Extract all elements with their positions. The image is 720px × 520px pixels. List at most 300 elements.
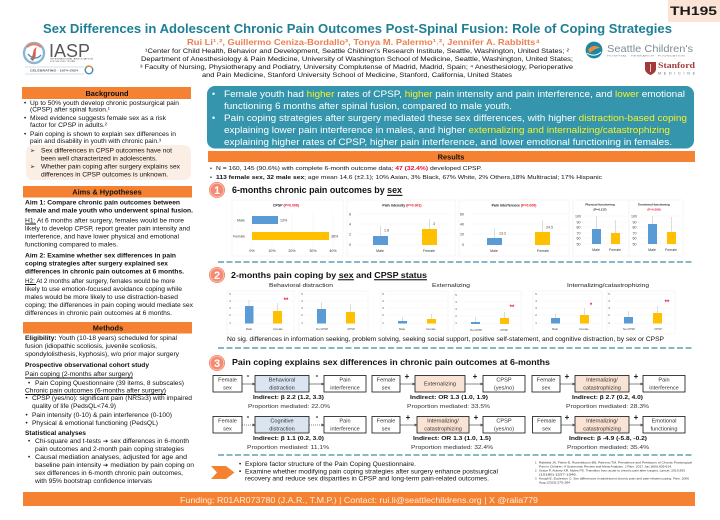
references: (10180):1537-1546. — [539, 472, 577, 476]
hypothesis 2 — [25, 278, 194, 317]
chart group: internalizing/catastrophizing: CPSP — [654, 327, 662, 331]
chart group: behavioral distraction: 5 — [301, 292, 303, 296]
mediation: internalizing to pain interference: Proportion mediated: 28.3% — [566, 404, 649, 410]
background bullets: Up to 50% youth develop chronic postsurgical pain — [30, 100, 180, 107]
chart: emotional functioning by sex: 70 — [632, 231, 636, 235]
chart: emotional functioning by sex: (P=0.008) — [647, 208, 661, 212]
mediation: cognitive distraction to pain interference: Proportion mediated: 11.1% — [247, 445, 329, 451]
methods heading: Methods — [93, 324, 123, 332]
chart: pain intensity by sex: Pain intensity (P=0.001) — [382, 204, 422, 208]
statistical analyses — [25, 430, 195, 485]
chart: pain intensity by sex: 4 — [349, 222, 351, 226]
chart group: externalizing: 1 — [382, 321, 384, 325]
logo: IASP: CELEBRATING · 1974–2024 — [30, 68, 79, 72]
references: Grace P, Aubrey KR, Myles PS. Transition from acute to chronic pain after surgery. Lancet. 2019;393 — [539, 468, 686, 472]
chart title: behavioral distraction: Behavioral distraction — [269, 283, 333, 289]
chart: CPSP rate by sex: 0% — [249, 249, 255, 253]
chart group: behavioral distraction: 5 — [229, 292, 231, 296]
references: Aug;123(3):275-284. — [539, 480, 571, 484]
chart: pain interference by sex: 20 — [460, 232, 464, 236]
logo: Seattle Children's: HOSPITAL · RESEARCH · FOUNDATION — [607, 54, 686, 58]
mediation: internalizing to pain interference: sex — [542, 386, 551, 392]
chart: pain intensity by sex: Female — [423, 249, 435, 253]
logo: Stanford Medicine — [645, 61, 696, 76]
key findings panel: explaining lower pain interference in males, and higher externalizing and internalizing/catastrophizing — [224, 125, 670, 135]
affiliations: ¹Center for Child Health, Behavior and Development, Seattle Children's Research Institute, Seattle, Washington, United States; ² — [145, 48, 569, 55]
chart: pain interference by sex: 24.5 — [546, 226, 553, 230]
chart: physical functioning by sex: 100 — [575, 214, 581, 218]
hypothesis 2: coping; the differences in pain coping would mediate sex — [25, 302, 194, 309]
chart: CPSP rate by sex: 10% — [268, 249, 276, 253]
chart group: internalizing/catastrophizing: No-CPSP — [623, 327, 635, 331]
chart group: internalizing/catastrophizing: * — [590, 303, 593, 309]
knowledge gaps callout: ➢ — [30, 148, 35, 155]
mediation: internalizing to CPSP: + — [406, 413, 411, 422]
study design: Prospective observational cohort study — [25, 362, 150, 369]
mediation: cognitive distraction to pain interference: interference — [330, 426, 360, 432]
hypothesis 1: H1: At 6 months after surgery, females would be more — [25, 217, 185, 224]
mediation: cognitive distraction to pain interference: distraction — [269, 426, 295, 432]
mediation: internalizing to emotional functioning: functioning — [650, 426, 678, 432]
background bullets: pain and disability in youth with chronic pain.³ — [30, 138, 161, 145]
chart group: behavioral distraction: 4 — [301, 299, 303, 303]
future directions: • — [239, 468, 241, 475]
knowledge gaps callout: been well characterized in adolescents. — [41, 155, 157, 162]
mediation: behavioral distraction to pain interference: - — [247, 371, 250, 380]
mediation: behavioral distraction to pain interference: Female — [218, 378, 237, 384]
chart group: externalizing: 4 — [455, 300, 457, 304]
mediation: internalizing to emotional functioning: + — [634, 413, 639, 422]
mediation: cognitive distraction to pain interference: Indirect: β 1.1 (0.2, 3.0) — [253, 436, 324, 442]
chart group: internalizing/catastrophizing: 2 — [535, 313, 537, 317]
affiliations: and Pain Medicine, Stanford University School of Medicine, Stanford, California, United States — [202, 72, 512, 79]
mediation: internalizing to pain interference: Pain — [658, 378, 670, 384]
funding and contact footer — [23, 492, 695, 506]
chart group: externalizing — [381, 283, 521, 334]
chart title: externalizing: Externalizing — [432, 283, 470, 289]
aim 1: female and male youth who underwent spinal fusion. — [25, 207, 193, 214]
mediation: cognitive distraction to pain interference: Cognitive — [270, 418, 294, 424]
chart: physical functioning by sex: 80 — [576, 226, 580, 230]
chart group: externalizing: No-CPSP — [470, 328, 482, 332]
mediation: behavioral distraction to pain interference: Behavioral — [269, 378, 295, 384]
aim 2: Aim 2: Examine whether sex differences in pain — [25, 252, 176, 259]
key findings panel: Female youth had higher rates of CPSP, higher pain intensity and pain interference, and lower emotional — [224, 89, 685, 99]
hypothesis 1: functioning compared to males. — [25, 241, 118, 248]
hypothesis 1 — [25, 217, 191, 248]
mediation: internalizing to pain interference: Female — [537, 378, 555, 384]
chart: physical functioning by sex: Male — [592, 248, 600, 252]
results heading — [208, 151, 695, 162]
aims heading: Aims & Hypotheses — [72, 188, 142, 196]
eligibility — [25, 335, 180, 358]
chart: emotional functioning by sex: 50 — [632, 242, 636, 246]
eligibility: spondylolisthesis, kyphosis), w/o prior major surgery — [25, 351, 180, 358]
background bullets: factor for CPSP in adults.² — [30, 122, 107, 129]
references: Keogh E, Eccleston C. Sex differences in adolescent chronic pain and pain-related coping. Pain. 2006 — [539, 476, 690, 480]
chart group: internalizing/catastrophizing — [533, 283, 675, 334]
mediation: externalizing to CPSP: Indirect: OR 1.3 (1.0, 1.9) — [410, 395, 488, 401]
chart group: behavioral distraction: 3 — [301, 306, 303, 310]
aim 2: coping strategies after surgery explained sex — [25, 260, 169, 267]
mediation: internalizing to emotional functioning: Proportion mediated: 35.4% — [567, 445, 649, 451]
mediation: externalizing to CPSP: + — [473, 372, 478, 381]
background bullets: • — [24, 131, 26, 138]
mediation: internalizing to CPSP: catastrophizing — [424, 426, 462, 432]
chart: emotional functioning by sex: Emotional functioning — [638, 202, 670, 206]
mediation: externalizing to CPSP: Proportion mediated: 33.5% — [407, 404, 490, 410]
chart: pain intensity by sex — [347, 200, 455, 256]
chart: CPSP rate by sex: 40% — [329, 249, 337, 253]
chart: pain interference by sex: 13.2 — [499, 232, 506, 236]
mediation: internalizing to CPSP — [372, 413, 525, 451]
section 2 number badge: 2 — [214, 270, 220, 282]
statistical analyses: Statistical analyses — [25, 430, 87, 437]
mediation: externalizing to CPSP: Female — [377, 378, 395, 384]
references: 2. — [535, 468, 537, 472]
chart group: behavioral distraction: No-CPSP — [316, 327, 328, 331]
mediation: internalizing to pain interference: interference — [649, 386, 679, 392]
chart group: behavioral distraction: CPSP — [347, 327, 355, 331]
sample description — [210, 166, 602, 181]
chart group: externalizing: 2 — [455, 314, 457, 318]
section 3 heading: Pain coping explains sex differences in chronic pain outcomes at 6-months — [232, 357, 550, 367]
measures: • — [28, 380, 30, 387]
mediation: externalizing to CPSP — [372, 372, 525, 410]
logo: IASP: FOR THE STUDY OF PAIN — [50, 60, 76, 63]
sample description: 113 female sex, 32 male sex ; age mean 14.6 (±2.1); 10% Asian, 3% Black, 67% White, 2% Others,18% Multiracial; 17% Hispanic — [216, 175, 602, 181]
knowledge gaps callout: Whether pain coping after surgery explains sex — [41, 163, 181, 170]
section 1 number badge — [209, 182, 225, 198]
chart group: internalizing/catastrophizing: 1 — [535, 321, 537, 325]
aim 1: Aim 1: Compare chronic pain outcomes between — [25, 199, 180, 206]
statistical analyses: with 95% bootstrap confidence intervals — [34, 478, 152, 485]
measures: Pain intensity (0-10) & pain interference (0-100) — [32, 412, 172, 419]
chart group: externalizing: 5 — [455, 293, 457, 297]
chart group: internalizing/catastrophizing: 5 — [608, 292, 610, 296]
chart group: behavioral distraction: 1 — [229, 321, 231, 325]
chart group: externalizing: 5 — [382, 292, 384, 296]
chart group: internalizing/catastrophizing: ** — [665, 300, 670, 306]
authors: Rui Li¹˒², Guillermo Ceniza-Bordallo³, Tonya M. Palermo¹˒², Jennifer A. Rabbitts⁴ — [187, 37, 540, 47]
future directions: Examine whether modifying pain coping strategies after surgery enhance postsurgical — [245, 468, 498, 475]
mediation: behavioral distraction to pain interference — [213, 371, 366, 410]
statistical analyses: • — [28, 454, 30, 461]
statistical analyses: pain outcomes and 2-month pain coping strategies — [35, 446, 184, 453]
chart: emotional functioning by sex: Male — [648, 248, 656, 252]
chart: pain interference by sex: Pain interference (P=0.009) — [492, 204, 536, 208]
chart group: externalizing: 2 — [382, 313, 384, 317]
eligibility: fusion (idiopathic scoliosis, juvenile scoliosis, — [25, 343, 157, 350]
section 2 heading: 2-months pain coping by sex and CPSP status — [231, 270, 427, 280]
background heading: Background — [85, 89, 129, 98]
chart: CPSP rate by sex: 38% — [331, 234, 339, 238]
key findings panel: explaining higher rates of CPSP, higher pain interference, and lower emotional functioning in females. — [224, 137, 672, 147]
chart group: internalizing/catastrophizing: 4 — [535, 299, 537, 303]
background bullets: • — [24, 115, 26, 122]
mediation: internalizing to emotional functioning: Female — [537, 418, 556, 424]
mediation: externalizing to CPSP: (yes/no) — [494, 386, 514, 392]
chart: pain intensity by sex: 2 — [349, 232, 351, 236]
chart: physical functioning by sex: 70 — [576, 231, 580, 235]
future directions — [239, 461, 498, 483]
mediation: internalizing to CPSP: Indirect: OR 1.3 (1.0, 1.5) — [413, 436, 491, 442]
chart: pain interference by sex: 0 — [462, 243, 464, 247]
chart: pain interference by sex: Male — [490, 249, 498, 253]
statistical analyses: Causal mediation analyses, adjusted for age and — [35, 454, 188, 461]
aims heading — [23, 186, 192, 198]
icon: future directions chevron — [211, 466, 234, 479]
knowledge gaps callout: ➢ — [30, 164, 35, 171]
affiliations — [140, 48, 574, 79]
mediation: cognitive distraction to pain interference: Pain — [339, 418, 351, 424]
poster id badge — [668, 0, 720, 22]
aim 2 — [25, 252, 184, 275]
mediation: internalizing to CPSP: (yes/no) — [494, 426, 514, 432]
mediation: internalizing to emotional functioning: Internalizing/ — [586, 418, 618, 424]
logo: Stanford Medicine: MEDICINE — [658, 72, 696, 76]
references — [535, 460, 693, 484]
hypothesis 2: differences in chronic pain outcomes at 6 months. — [25, 310, 172, 317]
background bullets: Mixed evidence suggests female sex as a risk — [30, 115, 167, 122]
logo: IASP: IASP — [49, 41, 90, 61]
chart: physical functioning by sex: Physical functioning — [585, 202, 615, 206]
chart group: behavioral distraction: 4 — [229, 299, 231, 303]
mediation: behavioral distraction to pain interference: distraction — [269, 386, 295, 392]
mediation: internalizing to emotional functioning: + — [565, 413, 570, 422]
mediation: internalizing to CPSP: CPSP — [496, 418, 512, 424]
section 2 number badge — [209, 267, 225, 283]
chart: emotional functioning by sex — [629, 200, 683, 256]
knowledge gaps callout: differences in CPSP outcomes is unknown. — [41, 171, 168, 178]
panel: background — [22, 87, 191, 180]
chart: CPSP rate by sex: 13% — [280, 218, 288, 222]
logo: Stanford Medicine: Stanford — [658, 61, 696, 70]
mediation: internalizing to CPSP: sex — [382, 426, 391, 432]
mediation: behavioral distraction to pain interference: Pain — [339, 378, 351, 384]
chart: emotional functioning by sex: 100 — [631, 214, 637, 218]
chart: CPSP rate by sex: Female — [233, 234, 245, 238]
chart: physical functioning by sex — [573, 200, 629, 256]
chart: pain intensity by sex: Male — [376, 249, 384, 253]
statistical analyses: Chi-square and t-tests ➔ sex differences in 6-month — [35, 438, 190, 445]
mediation: internalizing to pain interference: + — [634, 372, 639, 381]
chart: pain interference by sex — [459, 200, 569, 256]
section 3 number badge: 3 — [214, 358, 220, 370]
chart group: behavioral distraction: 3 — [229, 306, 231, 310]
mediation: internalizing to emotional functioning — [532, 413, 685, 451]
chart: CPSP rate by sex: Male — [237, 218, 245, 222]
mediation: internalizing to emotional functioning: sex — [542, 426, 551, 432]
mediation: externalizing to CPSP: sex — [382, 386, 391, 392]
chart group: internalizing/catastrophizing: 2 — [608, 313, 610, 317]
coping note: No sig. differences in information seeking, problem solving, seeking social support, positive self-statement, and cognitive distraction, by sex or CPSP — [227, 337, 664, 343]
sample description: • — [210, 175, 212, 181]
chart: pain interference by sex: Female — [537, 249, 549, 253]
future directions: recovery and reduce sex disparities in CPSP and long-term pain-related outcomes. — [245, 476, 489, 483]
background bullets: Pain coping is shown to explain sex differences in — [30, 131, 177, 138]
mediation: internalizing to emotional functioning: Indirect: β -4.9 (-5.8, -0.2) — [569, 436, 647, 442]
mediation: behavioral distraction to pain interference: interference — [330, 386, 360, 392]
section 3 number badge — [209, 355, 225, 371]
hypothesis 2: H2: At 2 months after surgery, females would be more — [25, 278, 176, 285]
mediation: cognitive distraction to pain interference: - — [316, 412, 319, 421]
references: 3. — [535, 476, 537, 480]
background bullets — [24, 100, 180, 145]
key findings panel: • — [212, 113, 215, 123]
measures: Pain coping (2-months after surgery) — [25, 371, 133, 378]
chart: CPSP rate by sex: 30% — [309, 249, 317, 253]
chart group: behavioral distraction: 2 — [301, 313, 303, 317]
chart group: externalizing: 3 — [455, 307, 457, 311]
knowledge gaps callout — [26, 145, 191, 180]
mediation: internalizing to CPSP: + — [474, 413, 479, 422]
title: Sex Differences in Adolescent Chronic Pain Outcomes Post-Spinal Fusion: Role of Coping Strategies — [43, 22, 672, 36]
key findings panel: Pain coping strategies after surgery mediated these sex differences, with higher distraction-based coping — [224, 113, 687, 123]
chart: CPSP rate by sex: 20% — [288, 249, 296, 253]
measures: quality of life (PedsQL<74.9) — [32, 403, 116, 410]
measures: Physical & emotional functioning (PedsQL) — [32, 420, 158, 427]
chart: physical functioning by sex: (P=0.117) — [593, 208, 607, 212]
mediation: externalizing to CPSP: + — [405, 372, 410, 381]
panel: aims and hypotheses — [23, 186, 194, 317]
references: 1. — [535, 460, 537, 464]
chart group: behavioral distraction: 1 — [301, 321, 303, 325]
logo: IASP: INTERNATIONAL ASSOCIATION — [50, 58, 94, 60]
chart group: behavioral distraction: Female — [273, 327, 283, 331]
mediation: behavioral distraction to pain interference: Indirect: β 2.2 (1.2, 3.3) — [253, 395, 324, 401]
chart: emotional functioning by sex: 80 — [632, 226, 636, 230]
key findings panel: • — [212, 89, 215, 99]
logo: IASP — [24, 41, 94, 74]
statistical analyses: baseline pain intensity ➔ mediation by pain coping on — [35, 462, 195, 469]
mediation: internalizing to pain interference: + — [565, 372, 570, 381]
chart group: externalizing: 3 — [382, 306, 384, 310]
chart group: internalizing/catastrophizing: 1 — [608, 321, 610, 325]
chart group: behavioral distraction: 2 — [229, 313, 231, 317]
hypothesis 2: males would be more likely to use distraction-based — [25, 294, 179, 301]
future directions: Explore factor structure of the Pain Coping Questionnaire. — [245, 461, 416, 468]
affiliations: Department of Anesthesiology & Pain Medicine, University of Washington School of Medicine, Seattle, Washington, United States; — [141, 56, 573, 63]
chart title: internalizing/catastrophizing: Internalizing/catastrophizing — [567, 283, 649, 289]
chart group: internalizing/catastrophizing: Male — [552, 327, 558, 331]
mediation: internalizing to pain interference — [532, 372, 685, 410]
chart: physical functioning by sex: Female — [609, 248, 621, 252]
chart: emotional functioning by sex: 90 — [632, 220, 636, 224]
chart: pain intensity by sex: 3 — [433, 222, 435, 226]
mediation: cognitive distraction to pain interference: - — [247, 412, 250, 421]
measures: Pain Coping Questionnaire (39 items, 8 subscales) — [35, 380, 184, 387]
mediation: internalizing to emotional functioning: Emotional — [652, 418, 676, 424]
aim 2: differences in chronic pain outcomes at 6 months. — [25, 268, 184, 275]
logo: Seattle Children's — [586, 42, 693, 58]
chart: emotional functioning by sex: 60 — [632, 236, 636, 240]
hypothesis 1: likely to develop CPSP, report greater pain intensity and — [25, 225, 191, 232]
knowledge gaps callout: Sex differences in CPSP outcomes have not — [41, 147, 172, 154]
statistical analyses: sex differences in 6-month chronic pain outcomes, — [35, 470, 183, 477]
chart: emotional functioning by sex: Female — [665, 248, 677, 252]
chart: pain interference by sex: 60 — [460, 212, 464, 216]
background bullets: • — [24, 100, 26, 107]
measures: Chronic pain outcomes (6-months after surgery) — [25, 388, 166, 394]
results heading: Results — [438, 152, 464, 161]
chart group: behavioral distraction: Male — [246, 327, 252, 331]
mediation: cognitive distraction to pain interference — [213, 412, 366, 451]
chart group: externalizing: CPSP — [500, 328, 508, 332]
references: Rabbitts JA, Fisher E, Rosenbloom BN, Palermo TM. Prevalence and Predictors of Chronic Postsurgical — [539, 460, 693, 464]
chart group: externalizing: 1 — [455, 321, 457, 325]
mediation: internalizing to pain interference: Indirect: β 2.7 (0.2, 4.0) — [572, 395, 643, 401]
mediation: cognitive distraction to pain interference: Female — [218, 418, 237, 424]
chart: physical functioning by sex: 90 — [576, 220, 580, 224]
panel: methods — [23, 322, 195, 485]
chart group: externalizing: Female — [426, 327, 436, 331]
chart: pain intensity by sex: 0 — [349, 243, 351, 247]
chart group: behavioral distraction: ** — [284, 298, 289, 304]
funding and contact footer: Funding: R01AR073780 (J.A.R., T.M.P.) | Contact: rui.li@seattlechildrens.org | X @ralia779 — [180, 495, 538, 505]
mediation: internalizing to CPSP: Internalizing/ — [427, 418, 459, 424]
statistical analyses: • — [28, 438, 30, 445]
mediation: internalizing to CPSP: Proportion mediated: 32.4% — [411, 445, 493, 451]
chart: pain intensity by sex: 1.8 — [384, 228, 389, 232]
measures: • — [26, 412, 28, 419]
logo: Seattle Children's: Seattle Children's — [607, 43, 693, 55]
mediation: internalizing to emotional functioning: catastrophizing — [583, 426, 621, 432]
key findings panel — [207, 86, 694, 148]
chart: physical functioning by sex: 50 — [576, 242, 580, 246]
mediation: behavioral distraction to pain interference: - — [316, 371, 319, 380]
hypothesis 1: interference, and have lower physical and emotional — [25, 233, 179, 240]
mediation: externalizing to CPSP: CPSP — [496, 378, 512, 384]
chart: physical functioning by sex: 60 — [576, 236, 580, 240]
chart group: internalizing/catastrophizing: 4 — [608, 299, 610, 303]
references: Pain in Children: A Systematic Review and Meta-Analysis. J Pain. 2017 Jun;18(6):605-614. — [539, 464, 672, 468]
eligibility: Eligibility: Youth (10-18 years) scheduled for spinal — [25, 335, 177, 342]
mediation: behavioral distraction to pain interference: Proportion mediated: 22.0% — [248, 404, 330, 410]
aim 1 — [25, 199, 193, 214]
key findings panel: functioning 6 months after spinal fusion, compared to male youth. — [224, 101, 512, 111]
measures — [25, 371, 193, 427]
section 1 number badge: 1 — [214, 185, 220, 197]
sample description: • — [210, 166, 212, 172]
poster id badge: TH195 — [670, 6, 718, 18]
chart group: externalizing: Male — [399, 327, 405, 331]
chart: CPSP rate by sex: CPSP (P=0.006) — [273, 204, 299, 208]
mediation: internalizing to pain interference: Internalizing/ — [586, 378, 618, 384]
mediation: cognitive distraction to pain interference: sex — [223, 426, 232, 432]
chart group: externalizing: 4 — [382, 299, 384, 303]
affiliations: ³ Faculty of Nursing, Physiotherapy and Podiatry, University Complutense of Madrid, Madrid, Spain; ⁴ Anesthesiology, Perioperative — [140, 64, 574, 71]
chart group: internalizing/catastrophizing: Female — [579, 327, 589, 331]
background heading — [22, 87, 191, 99]
chart group: internalizing/catastrophizing: 3 — [535, 306, 537, 310]
measures: CPSP (yes/no): significant pain (NRS≥3) with impaired — [32, 395, 193, 402]
mediation: behavioral distraction to pain interference: sex — [223, 386, 232, 392]
chart group: internalizing/catastrophizing: 3 — [608, 306, 610, 310]
hypothesis 2: likely to use emotion-focused avoidance coping while — [25, 286, 183, 293]
mediation: internalizing to CPSP: Female — [377, 418, 395, 424]
future directions: • — [239, 461, 241, 468]
background bullets: (CPSP) after spinal fusion.¹ — [30, 107, 110, 114]
chart: pain interference by sex: 40 — [460, 222, 464, 226]
sample description: N = 160, 145 (90.6%) with complete 6-month outcome data; 47 (32.4%) developed CPSP. — [216, 166, 483, 172]
mediation: externalizing to CPSP: Externalizing — [424, 382, 456, 388]
chart: pain intensity by sex: 6 — [349, 212, 351, 216]
section 1 heading: 6-months chronic pain outcomes by sex — [232, 185, 402, 195]
chart group: internalizing/catastrophizing: 5 — [535, 292, 537, 296]
chart: CPSP rate by sex — [232, 200, 343, 256]
mediation: internalizing to pain interference: catastrophizing — [583, 386, 621, 392]
